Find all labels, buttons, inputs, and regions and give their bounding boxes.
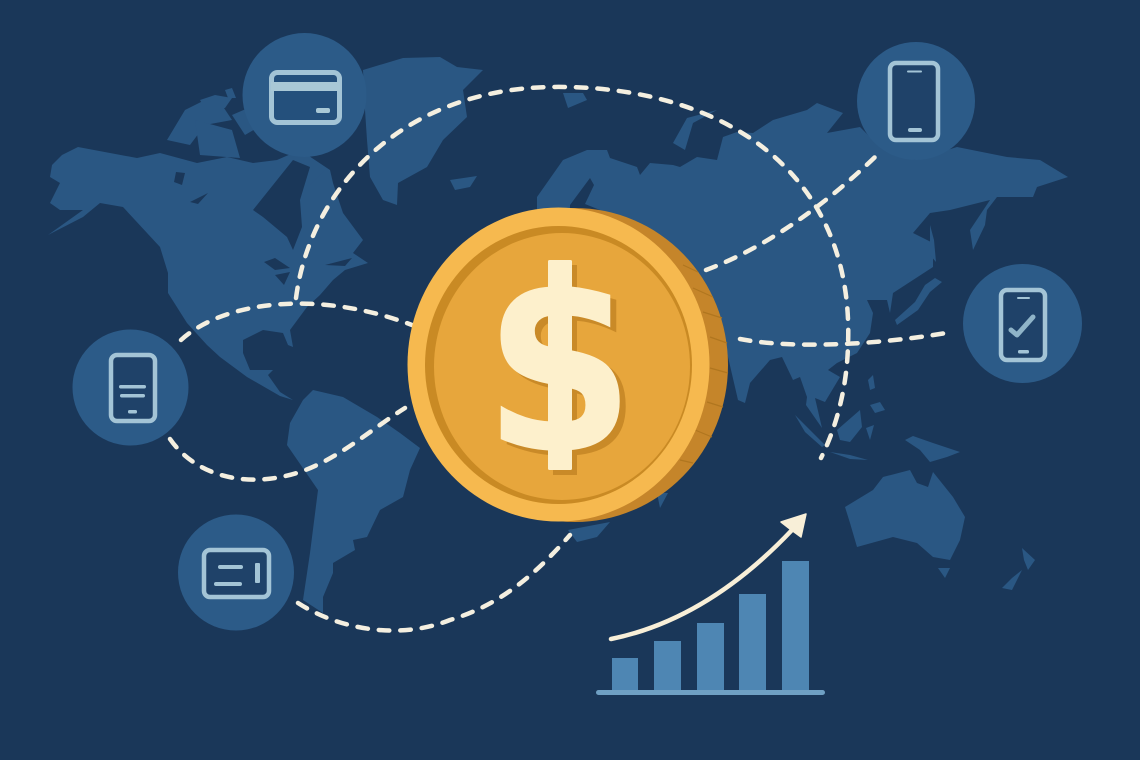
dashed route: great arc (170, 87, 952, 631)
dashed route: card to coin (298, 535, 570, 631)
Baltic Sea cut (570, 178, 600, 212)
coin edge (422, 208, 728, 522)
Sulawesi and Philippines (866, 375, 885, 440)
Svalbard (563, 93, 587, 108)
arrow: growth trend (611, 514, 806, 639)
continent: South America (287, 390, 420, 613)
world map (48, 57, 1068, 613)
icon: smartphone with check (963, 264, 1082, 383)
continent: Eurasia (537, 103, 1068, 428)
New Zealand (1002, 548, 1035, 590)
Sumatra (795, 415, 825, 447)
coin face (408, 208, 710, 522)
Sakhalin and Japan (895, 225, 942, 325)
continent: North America (48, 147, 368, 400)
Arctic islands (167, 88, 325, 190)
dashed route: left phone to coin (170, 408, 405, 480)
dashed route: right phone to coin (740, 332, 952, 345)
Greenland (363, 57, 483, 205)
icon: smartphone top right (857, 42, 975, 160)
Africa tip (568, 522, 610, 542)
Tasmania (938, 568, 950, 578)
icon: smartphone with text lines (72, 330, 188, 446)
dollar sign: $ (484, 218, 634, 510)
bar chart (596, 561, 825, 695)
New Guinea (905, 436, 960, 462)
icon: payment card with lines (178, 514, 294, 630)
infographic canvas (49, 33, 1082, 695)
dollar sign (500, 260, 620, 470)
dashed route: north america to coin (181, 304, 412, 340)
dollar sign shadow: $ (490, 223, 640, 515)
dashed route: top right phone to coin (706, 157, 875, 270)
Iceland (450, 176, 477, 190)
icon: credit card (242, 33, 366, 157)
Madagascar (657, 493, 668, 508)
Australia (845, 470, 965, 560)
Borneo (837, 410, 862, 442)
dollar sign shadow (506, 265, 626, 475)
Novaya Zemlya (673, 110, 717, 150)
Java (830, 452, 868, 460)
coin (408, 208, 728, 522)
Hudson Bay and lakes (174, 160, 352, 285)
